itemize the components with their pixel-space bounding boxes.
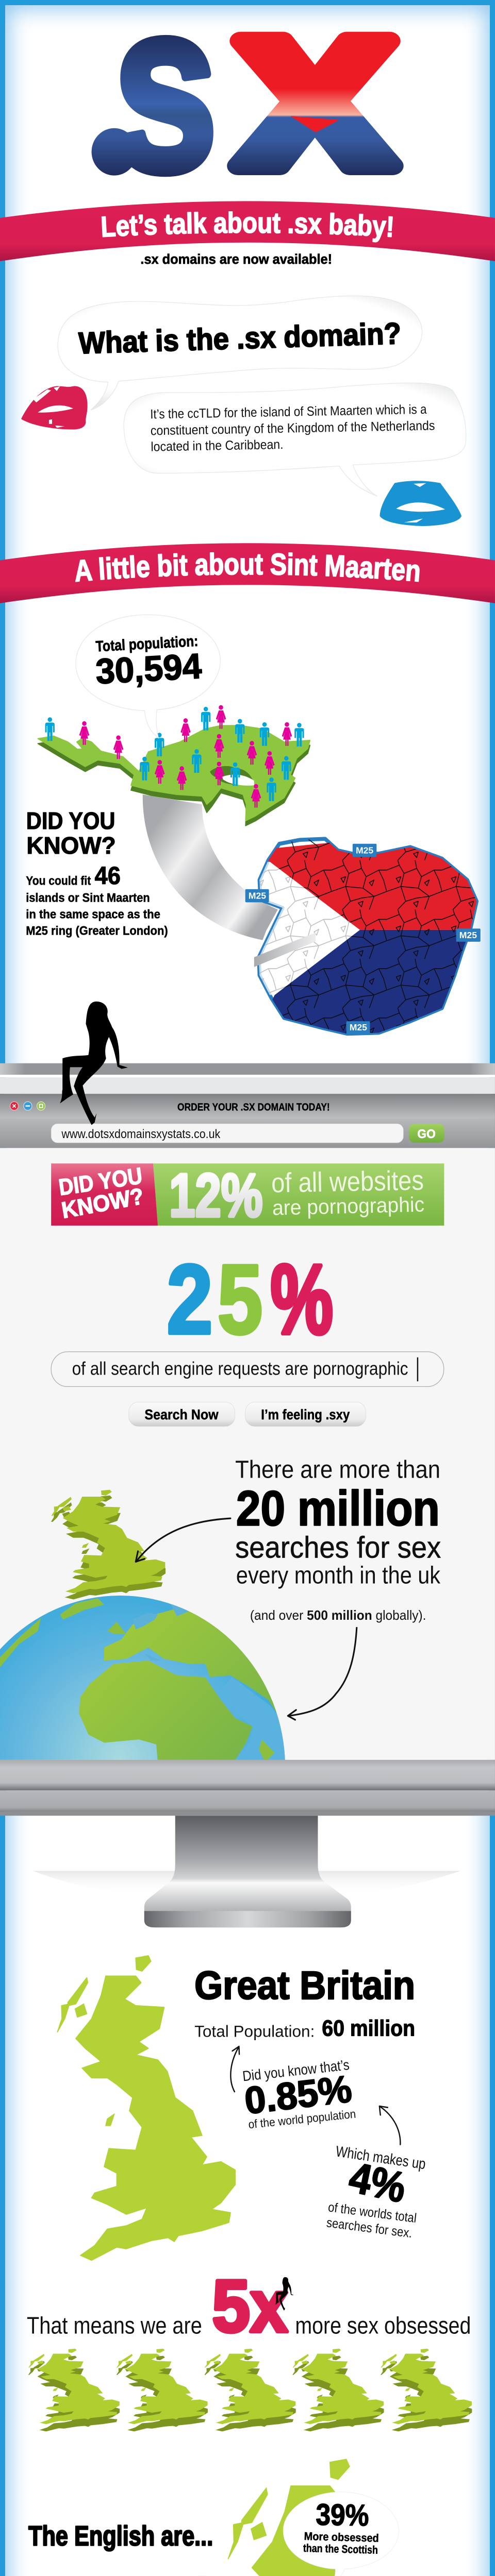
- statistic: 4%: [326, 2143, 427, 2241]
- arrow: to globe: [288, 1628, 357, 1720]
- speech bubble: 39%: [283, 2492, 399, 2576]
- map: UK with Northern Ireland: [183, 2459, 459, 2576]
- banner: a little bit about Sint Maarten: [0, 543, 495, 603]
- text: 20 million searches: 20 million: [236, 1481, 440, 1536]
- text: 5x more sex obsessed: more sex obsessed: [295, 2312, 471, 2339]
- speech bubble: total population: 30,594: [95, 647, 203, 691]
- banner: a little bit about Sint Maarten: A little bit about Sint Maarten: [75, 552, 420, 582]
- ad banner: 12% of websites: are pornographic: [272, 1193, 425, 1220]
- statistic: 4%: Which makes up: [335, 2143, 427, 2173]
- text: 20 million searches: [235, 1456, 441, 1623]
- map: Sint Maarten island with population figures: [38, 705, 310, 826]
- statistic: 0.85%: Did you know that’s: [242, 2057, 350, 2084]
- speech bubble: 39%: than the Scottish: [303, 2541, 378, 2556]
- speech bubble: ccTLD answer: [124, 383, 466, 496]
- five UK maps: [29, 2349, 471, 2431]
- logo: .sx: [91, 0, 397, 222]
- shadow under monitor: [33, 1871, 461, 1894]
- speech bubble: total population: [76, 615, 220, 738]
- map: 3D United Kingdom: [52, 1490, 164, 1599]
- icon: blue lips: [380, 481, 461, 526]
- text: 5x more sex obsessed: 5x: [212, 2265, 288, 2347]
- statistic: 25%: %: [271, 1244, 333, 1354]
- text: 20 million searches: (and over 500 million globally).: [250, 1608, 426, 1623]
- browser title bar: [0, 1094, 495, 1118]
- speech bubble: ccTLD answer: located in the Caribbean.: [151, 437, 284, 454]
- arrow: to UK: [136, 1518, 230, 1562]
- text: did you know: KNOW?: [26, 832, 116, 859]
- ad banner: 12% of websites: KNOW?: [60, 1183, 145, 1224]
- map: M25 ring in flag colours: M25: [350, 1023, 367, 1032]
- text: 20 million searches: There are more than: [235, 1456, 440, 1484]
- browser title bar: ORDER YOUR .SX DOMAIN TODAY!: [177, 1101, 330, 1113]
- statistic: 0.85%: 0.85%: [242, 2067, 354, 2123]
- speech bubble: ccTLD answer: It’s the ccTLD for the island of Sint Maarten which is a: [150, 402, 427, 422]
- section: monitor stand and shadow: [33, 1816, 461, 1927]
- text: total population: Total Population:: [194, 2022, 315, 2041]
- illustration: globe: [0, 1596, 285, 1760]
- monitor top bezel: [0, 1063, 495, 1094]
- browser address bar: www.dotsxdomainsxystats.co.uk: [61, 1127, 220, 1141]
- search box: [51, 1352, 444, 1386]
- statistic: 25%: 5: [218, 1244, 262, 1354]
- text: did you know: You could fit: [26, 874, 91, 888]
- section: statistics and five maps: [27, 2057, 471, 2576]
- speech bubble: 39%: 39%: [316, 2498, 369, 2533]
- text: did you know: islands or Sint Maarten: [26, 891, 150, 905]
- statistic: 4%: of the worlds total: [327, 2200, 417, 2226]
- monitor bottom bezel: [0, 1760, 495, 1816]
- statistic: 4%: 4%: [345, 2153, 410, 2212]
- speech bubble: total population: Total population:: [95, 633, 199, 655]
- browser address bar: GO: [417, 1127, 436, 1141]
- text: did you know: in the same space as the: [26, 907, 160, 922]
- speech bubble: 39%: More obsessed: [304, 2530, 379, 2545]
- browser content background: [0, 1148, 495, 1760]
- ad banner: 12% of websites: [51, 1161, 444, 1230]
- heading: the English are: The English are...: [28, 2521, 213, 2552]
- section: globe and monitor bottom bezel: [0, 1595, 495, 2260]
- arrow: 4% to 0.85%: [380, 2106, 400, 2145]
- section: a little bit about Sint Maarten: [0, 543, 495, 1036]
- arrow: population to percentage: [230, 2046, 239, 2092]
- text: 20 million searches: searches for sex: [235, 1531, 441, 1565]
- heading: Great Britain: Great Britain: [194, 1963, 415, 2007]
- text: 20 million searches: every month in the uk: [236, 1562, 441, 1589]
- search buttons: [129, 1402, 366, 1427]
- statistic: 0.85%: [242, 2057, 356, 2131]
- text: total population: [194, 2016, 415, 2041]
- subheading: domains available: .sx domains are now available!: [140, 251, 332, 267]
- map: M25 ring in flag colours: M25: [249, 891, 266, 901]
- text: did you know: 46: [95, 862, 121, 890]
- text: did you know: DID YOU: [26, 807, 115, 834]
- chart arrow: swoosh from island to M25: [143, 794, 278, 940]
- illustration: woman silhouette sitting on monitor: [60, 1002, 128, 1125]
- map: M25 ring in flag colours: [245, 827, 486, 1041]
- monitor stand: [144, 1816, 351, 1927]
- ad banner: 12% of websites: DID YOU: [57, 1163, 144, 1200]
- statistic: 4%: searches for sex.: [326, 2215, 413, 2241]
- search buttons: Search Now: [144, 1406, 219, 1422]
- logo: .sx: .: [91, 175, 92, 176]
- map: Great Britain: [57, 1956, 235, 2260]
- map: M25 ring in flag colours: M25: [459, 930, 477, 940]
- ad banner: 12% of websites: of all websites: [271, 1165, 424, 1199]
- map: M25 ring in flag colours: M25: [356, 845, 373, 855]
- statistic: 25%: 2: [167, 1244, 213, 1354]
- text: did you know: M25 ring (Greater London): [26, 924, 168, 938]
- section: browser window on monitor: [0, 1063, 495, 1760]
- icon: red lips: [21, 386, 88, 430]
- statistic: 25%: [167, 1244, 333, 1354]
- statistic: 0.85%: of the world population: [248, 2107, 356, 2131]
- ad banner: 12% of websites: 12%: [169, 1161, 262, 1230]
- section: header and intro: [0, 0, 495, 527]
- speech bubble: what is the .sx domain: What is the .sx domain?: [78, 317, 402, 361]
- search box: of all search engine requests are pornographic: [72, 1359, 408, 1379]
- text: total population: 60 million: [322, 2016, 415, 2041]
- text: did you know: [26, 807, 168, 938]
- banner: let's talk about .sx baby: [0, 201, 495, 261]
- browser address bar: [0, 1118, 495, 1148]
- banner: let's talk about .sx baby: Let’s talk about .sx baby!: [101, 211, 393, 242]
- text: 5x more sex obsessed: [27, 2265, 471, 2347]
- speech bubble: what is the .sx domain: [58, 296, 422, 410]
- search buttons: I’m feeling .sxy: [261, 1406, 350, 1422]
- speech bubble: ccTLD answer: constituent country of the Kingdom of the Netherlands: [151, 418, 435, 438]
- text: 5x more sex obsessed: That means we are: [27, 2312, 202, 2339]
